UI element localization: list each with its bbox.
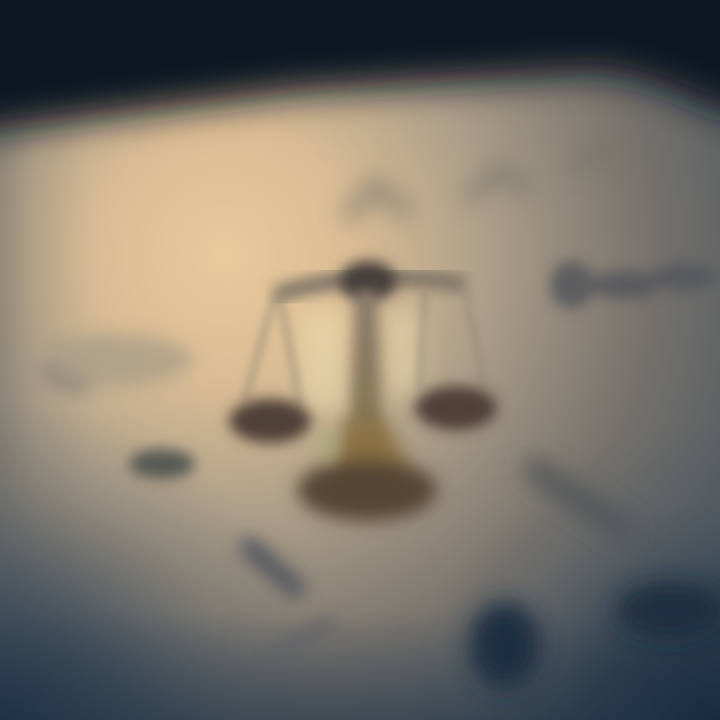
greenish base highlight [319, 427, 341, 463]
scale arm [275, 278, 465, 295]
balance scale [229, 261, 497, 521]
left pan [229, 399, 311, 443]
faint sketch: left oval [37, 334, 193, 388]
scale base [297, 420, 437, 521]
faint sketch: top mountains [345, 150, 612, 220]
diagonal mark: lower right [535, 470, 625, 530]
faint sketch: right handwriting [550, 261, 717, 309]
dark navy surround: top band [0, 0, 720, 140]
scale glow: pale light behind the scale [300, 310, 422, 410]
diagonal mark: lower centre [250, 548, 328, 652]
pan cords [245, 290, 485, 405]
small dark mark: left of scale [129, 449, 195, 479]
right pan [415, 386, 497, 430]
scale hub [340, 261, 396, 301]
dark blot: bottom right [469, 582, 720, 689]
scale column [350, 290, 382, 430]
